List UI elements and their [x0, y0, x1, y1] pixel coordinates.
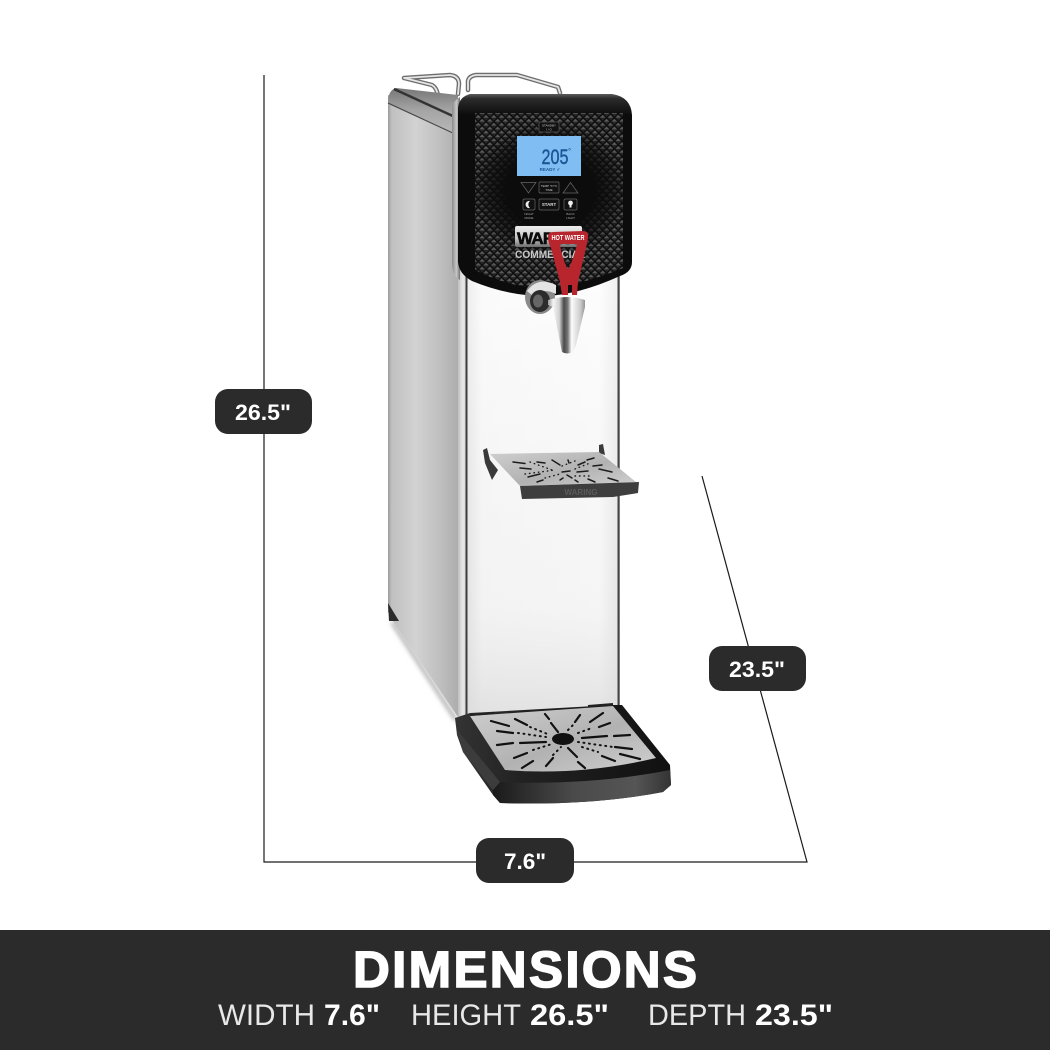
- red faucet handle: [548, 231, 588, 295]
- brand logo: [515, 226, 585, 261]
- cup rest slots: [513, 458, 618, 482]
- soft shadow along base: [392, 622, 456, 720]
- control buttons: NIGHT: [524, 212, 534, 216]
- LCD display: °: [568, 147, 571, 156]
- red faucet handle: HOT WATER: [552, 235, 584, 242]
- width spec: [218, 999, 380, 1032]
- chrome spout: [548, 297, 585, 354]
- depth spec: 23.5": [755, 999, 833, 1032]
- height spec: [411, 999, 609, 1032]
- bottom banner: [0, 930, 1050, 1050]
- LCD display: [517, 136, 581, 176]
- tray slots: [491, 713, 640, 768]
- rear foot: [388, 603, 399, 621]
- front corner strip: [458, 270, 467, 718]
- control buttons: [521, 182, 578, 220]
- height label: 26.5": [215, 389, 312, 434]
- LCD display: 205: [542, 146, 568, 169]
- brand logo: COMMERCIAL: [515, 249, 585, 261]
- banner title: DIMENSIONS: [353, 941, 697, 998]
- height spec: HEIGHT: [411, 999, 521, 1032]
- faucet collar: [525, 280, 556, 314]
- side panel: [388, 95, 458, 717]
- control buttons: MODE: [524, 216, 534, 220]
- depth spec: [648, 999, 833, 1032]
- height spec: 26.5": [530, 999, 609, 1032]
- dimension lines: [264, 75, 807, 862]
- lid: [388, 88, 458, 136]
- LCD display: READY ✓: [540, 167, 561, 172]
- standby button: I / O: [546, 128, 552, 132]
- standby button: STANDBY: [542, 124, 556, 128]
- product: hot water dispenser: [388, 75, 671, 804]
- depth label: 23.5": 23.5": [729, 657, 785, 682]
- width spec: 7.6": [324, 999, 380, 1032]
- control buttons: TIME: [545, 188, 553, 192]
- control head: [452, 94, 632, 296]
- control buttons: TEMP °F/°C: [541, 184, 558, 188]
- top carry handles: [404, 75, 560, 105]
- mid cup rest: WARING: [565, 488, 597, 497]
- width label: 7.6": 7.6": [504, 849, 546, 874]
- width label: 7.6": [476, 838, 574, 883]
- control buttons: LIGHT: [566, 216, 575, 220]
- mid cup rest: [483, 444, 639, 499]
- width spec: WIDTH: [218, 999, 315, 1032]
- depth label: 23.5": [709, 646, 806, 691]
- control buttons: START: [542, 202, 556, 207]
- height label: 26.5": 26.5": [235, 400, 291, 425]
- brand logo: WARING: [517, 229, 583, 248]
- control buttons: BACK: [566, 212, 575, 216]
- drip tray: [455, 704, 671, 804]
- depth spec: DEPTH: [648, 999, 746, 1032]
- front panel: [466, 270, 620, 716]
- standby button: [539, 122, 559, 132]
